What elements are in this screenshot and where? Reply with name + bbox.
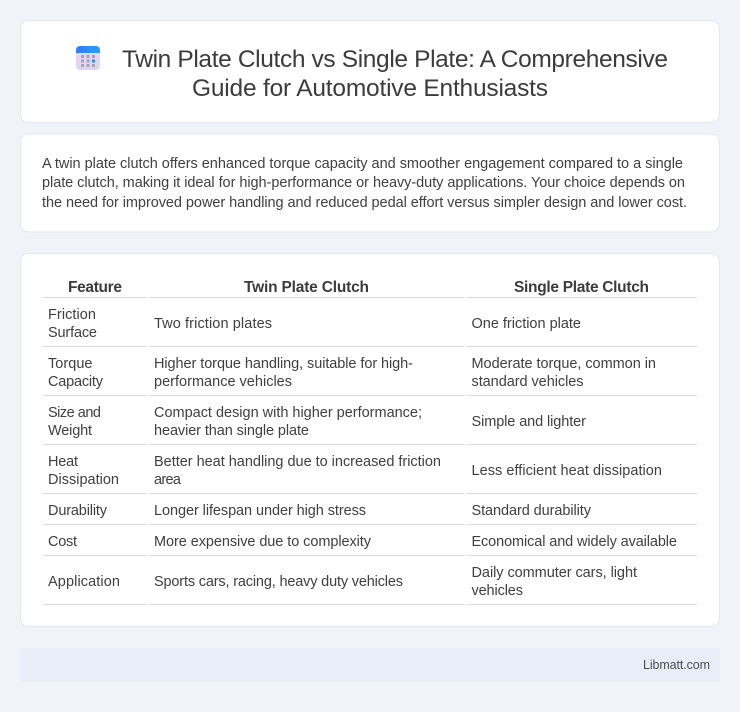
row: application [48, 565, 637, 599]
table header row: Feature [68, 279, 122, 296]
intro paragraph: A twin plate clutch offers enhanced torque capacity and smoother engagement compared to a single [42, 156, 683, 172]
row: cost [48, 534, 677, 550]
row: heat dissipation: Less efficient heat dissipation [472, 463, 662, 479]
row: size and weight: Simple and lighter [472, 414, 586, 430]
row: heat dissipation: Dissipation [48, 472, 119, 488]
row: size and weight: Compact design with higher performance; [154, 405, 422, 421]
row: friction surface: One friction plate [472, 316, 581, 332]
footer [20, 648, 720, 682]
row: friction surface: Two friction plates [154, 316, 272, 332]
title [122, 46, 668, 102]
row: heat dissipation: Heat [48, 454, 78, 470]
row: cost: More expensive due to complexity [154, 534, 372, 550]
row: torque capacity: Capacity [48, 374, 104, 390]
intro paragraph: the need for improved power handling and reduced pedal effort versus simpler design and lower cost. [42, 195, 687, 211]
table header row [68, 279, 649, 296]
row: application: Sports cars, racing, heavy duty vehicles [154, 574, 403, 590]
row: torque capacity [48, 356, 656, 390]
row: friction surface: Surface [48, 325, 97, 341]
intro paragraph: plate clutch, making it ideal for high-performance or heavy-duty applications. Your choice depends on [42, 175, 685, 191]
row: torque capacity: standard vehicles [472, 374, 584, 390]
row: cost: Cost [48, 534, 77, 550]
footer: Libmatt.com [643, 658, 710, 672]
table header row: Twin Plate Clutch [244, 279, 369, 296]
row: application: Daily commuter cars, light [472, 565, 637, 581]
row: size and weight: heavier than single plate [154, 423, 309, 439]
panel: intro text [20, 134, 720, 232]
intro paragraph [42, 156, 687, 211]
panel: comparison table [20, 254, 720, 626]
icon: calendar [76, 46, 100, 70]
table header row: Single Plate Clutch [514, 279, 649, 296]
row: size and weight: Size and [48, 405, 101, 421]
row: heat dissipation: area [154, 472, 182, 488]
row: durability: Standard durability [472, 503, 592, 519]
row: torque capacity: Moderate torque, common in [472, 356, 656, 372]
row: size and weight [48, 405, 586, 439]
panel: header [20, 20, 720, 122]
row: heat dissipation [48, 454, 662, 488]
row: torque capacity: performance vehicles [154, 374, 292, 390]
title: Twin Plate Clutch vs Single Plate: A Comprehensive [122, 46, 668, 73]
row: heat dissipation: Better heat handling due to increased friction [154, 454, 441, 470]
row: application: vehicles [472, 583, 523, 599]
row: cost: Economical and widely available [472, 534, 677, 550]
row: friction surface: Friction [48, 307, 96, 323]
row: application: Application [48, 574, 120, 590]
row: durability: Durability [48, 503, 108, 519]
row: durability [48, 503, 592, 519]
row: torque capacity: Torque [48, 356, 92, 372]
row: friction surface [48, 307, 581, 341]
row: durability: Longer lifespan under high stress [154, 503, 366, 519]
title: Guide for Automotive Enthusiasts [192, 75, 548, 102]
row: size and weight: Weight [48, 423, 92, 439]
row: torque capacity: Higher torque handling, suitable for high- [154, 356, 413, 372]
